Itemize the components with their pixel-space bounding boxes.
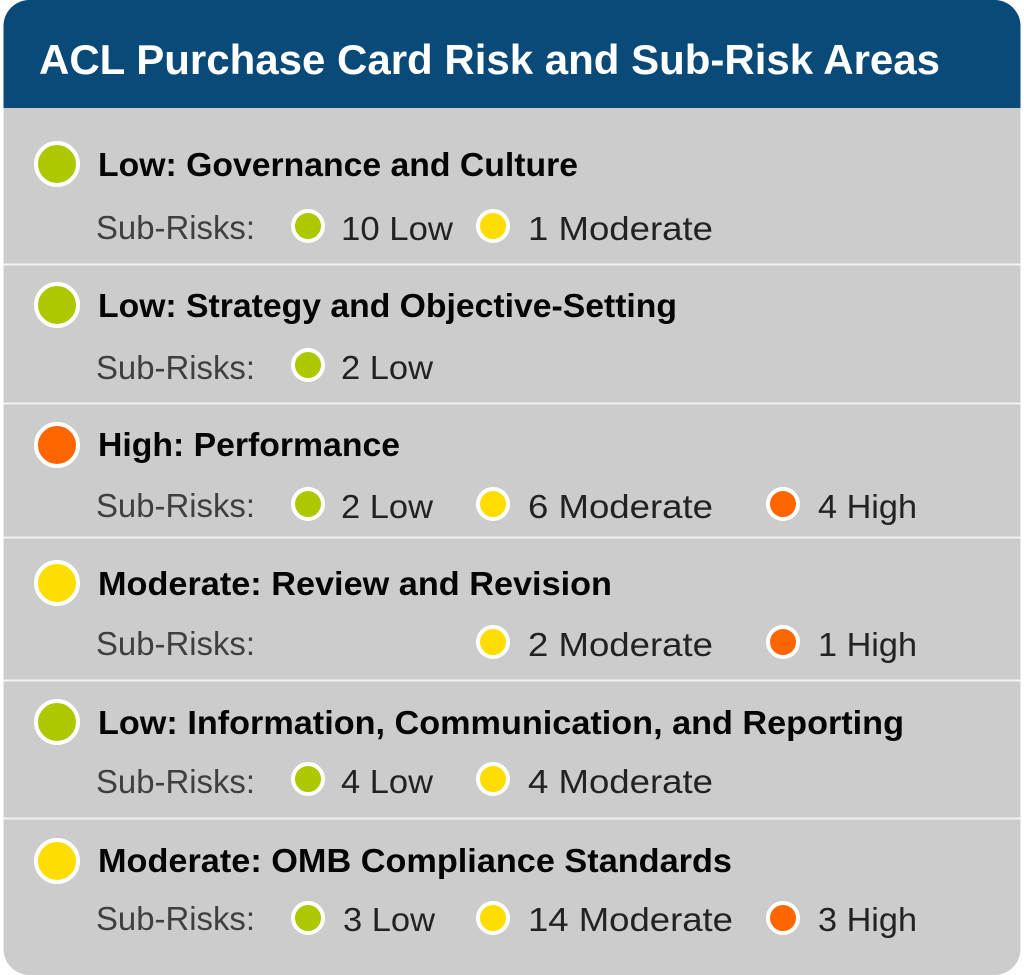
count: 4 moderate: 4 Moderate [528, 763, 713, 800]
icon: low sub-risk dot [293, 764, 323, 794]
count: 3 low: 3 Low [343, 901, 435, 938]
row: OMB Compliance Standards [36, 840, 917, 938]
row: Governance and Culture [36, 143, 713, 247]
count: 4 high: 4 High [818, 488, 917, 525]
row: Review and Revision [36, 562, 917, 663]
icon: high sub-risk dot [768, 627, 798, 657]
icon: high risk dot [36, 424, 78, 466]
count: 10 low: 10 Low [341, 210, 453, 247]
label: sub-risks: Sub-Risks: [96, 625, 255, 662]
icon: moderate sub-risk dot [478, 903, 508, 933]
count: 4 low: 4 Low [341, 763, 433, 800]
count: 1 high: 1 High [818, 626, 917, 663]
count: 2 moderate: 2 Moderate [528, 626, 713, 663]
title: ACL Purchase Card Risk and Sub-Risk Areas [39, 36, 940, 83]
icon: moderate sub-risk dot [478, 489, 508, 519]
heading: OMB Compliance Standards: Moderate: OMB Compliance Standards [98, 842, 732, 879]
count: 2 low: 2 Low [341, 488, 433, 525]
title banner [4, 0, 1020, 108]
row: Strategy and Objective-Setting [36, 284, 677, 386]
heading: Review and Revision: Moderate: Review and Revision [98, 565, 612, 602]
label: sub-risks: Sub-Risks: [96, 349, 255, 386]
icon: low sub-risk dot [293, 489, 323, 519]
heading: Performance: High: Performance [98, 426, 400, 463]
label: sub-risks: Sub-Risks: [96, 209, 255, 246]
row: Information, Communication, and Reporting [36, 701, 904, 800]
icon: moderate sub-risk dot [478, 211, 508, 241]
icon: low risk dot [36, 284, 78, 326]
icon: moderate risk dot [36, 840, 78, 882]
icon: low sub-risk dot [293, 350, 323, 380]
count: 3 high: 3 High [818, 901, 917, 938]
heading: Information, Communication, and Reporting: Low: Information, Communication, and Reporting [98, 704, 904, 741]
icon: low sub-risk dot [293, 903, 323, 933]
row: Performance [36, 424, 917, 525]
label: sub-risks: Sub-Risks: [96, 487, 255, 524]
label: sub-risks: Sub-Risks: [96, 900, 255, 937]
icon: low risk dot [36, 143, 78, 185]
icon: moderate sub-risk dot [478, 627, 508, 657]
icon: moderate risk dot [36, 562, 78, 604]
icon: low risk dot [36, 701, 78, 743]
count: 2 low: 2 Low [341, 349, 433, 386]
count: 1 moderate: 1 Moderate [528, 210, 713, 247]
heading: Strategy and Objective-Setting: Low: Strategy and Objective-Setting [98, 287, 677, 324]
count: 6 moderate: 6 Moderate [528, 488, 713, 525]
icon: high sub-risk dot [768, 489, 798, 519]
heading: Governance and Culture: Low: Governance and Culture [98, 146, 578, 183]
icon: high sub-risk dot [768, 903, 798, 933]
icon: moderate sub-risk dot [478, 764, 508, 794]
count: 14 moderate: 14 Moderate [528, 901, 733, 938]
label: sub-risks: Sub-Risks: [96, 763, 255, 800]
icon: low sub-risk dot [293, 211, 323, 241]
